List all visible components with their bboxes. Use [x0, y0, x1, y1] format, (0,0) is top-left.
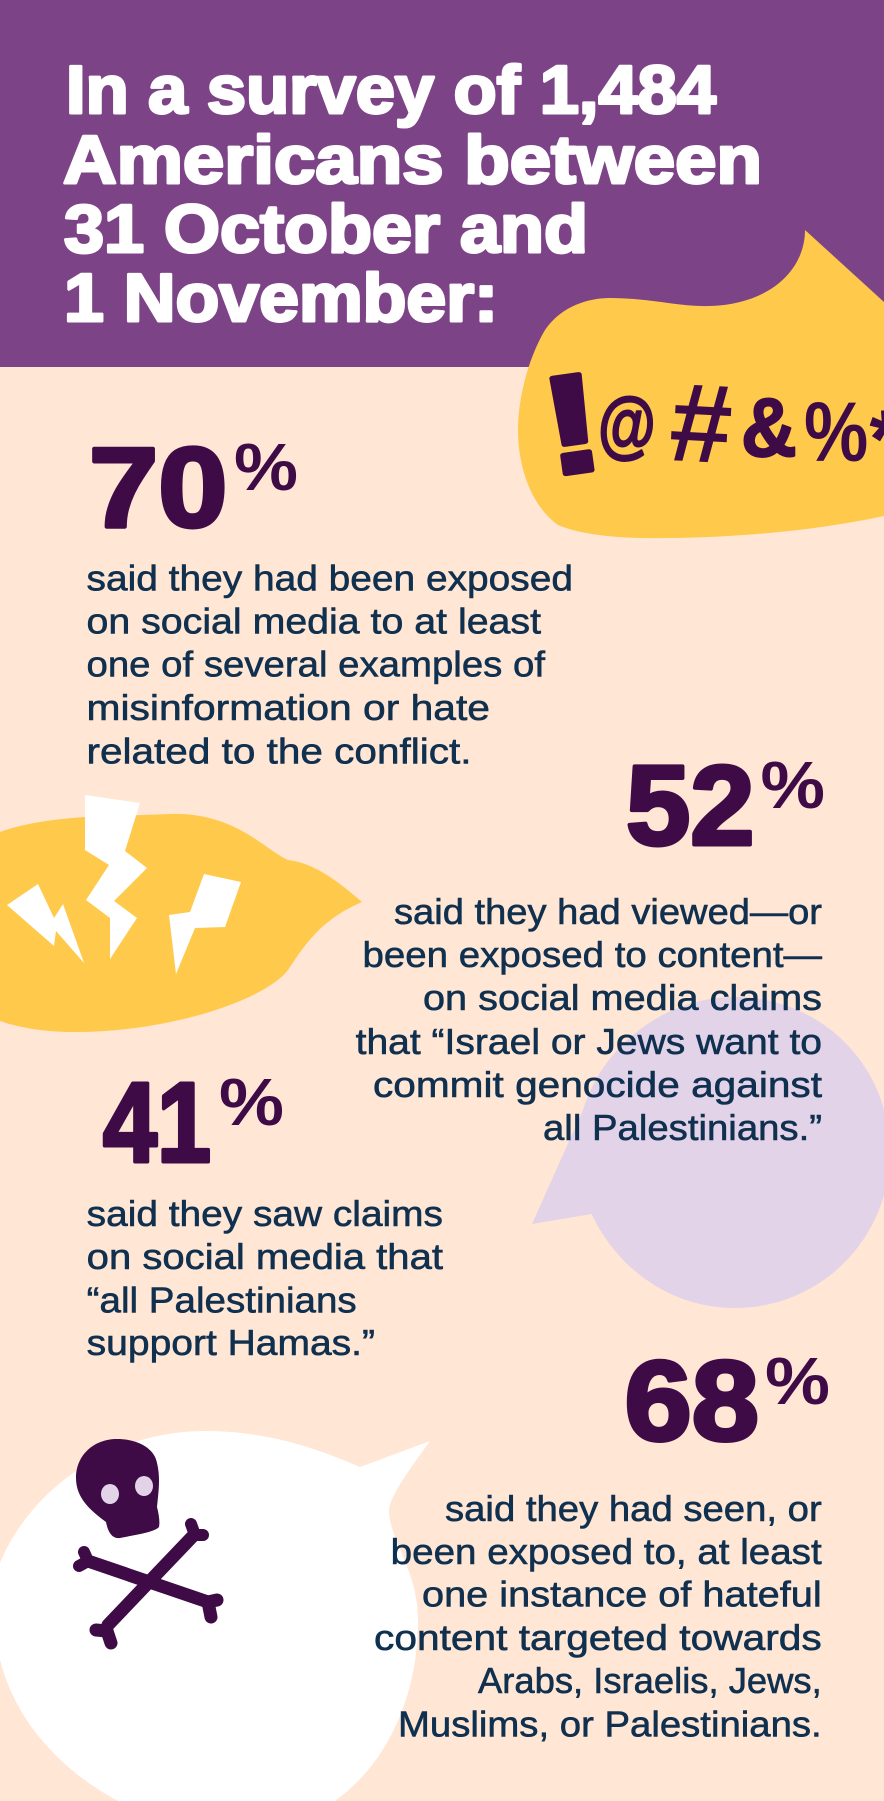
stat: 41 percent: “all Palestinians — [87, 1280, 357, 1321]
speech bubble: white — [0, 1431, 430, 1801]
stat: 70 percent: said they had been exposed — [86, 558, 573, 599]
stat: 68 percent: 68 — [624, 1338, 759, 1464]
stat: 70 percent: one of several examples of — [86, 644, 546, 685]
stat: 41 percent: on social media that — [87, 1236, 443, 1277]
stat: 41 percent: support Hamas.” — [87, 1322, 375, 1363]
stat: 70 percent: % — [234, 430, 298, 505]
stat: 68 percent: been exposed to, at least — [391, 1531, 822, 1572]
title — [63, 52, 762, 336]
header band — [0, 0, 884, 367]
stat: 52 percent: on social media claims — [423, 977, 822, 1018]
stat: 41 percent: 41 — [103, 1060, 211, 1186]
stat: 68 percent: content targeted towards — [374, 1617, 822, 1658]
speech bubble: profanity symbols: & — [741, 381, 797, 475]
stat: 70 percent: misinformation or hate — [86, 687, 490, 728]
stat: 70 percent: 70 — [89, 424, 228, 550]
stat: 52 percent: said they had viewed—or — [394, 891, 822, 932]
speech bubble: profanity symbols: @ — [598, 383, 656, 466]
stat: 52 percent: all Palestinians.” — [543, 1107, 822, 1148]
stat: 70 percent: on social media to at least — [86, 600, 541, 641]
title: In a survey of 1,484 — [66, 52, 716, 128]
stat: 68 percent: Arabs, Israelis, Jews, — [478, 1660, 822, 1701]
stat: 68 percent — [374, 1338, 830, 1745]
stat: 52 percent: been exposed to content— — [362, 934, 822, 975]
stat: 52 percent: commit genocide against — [373, 1064, 822, 1105]
speech bubble: lavender — [532, 997, 884, 1308]
stat: 52 percent — [356, 742, 825, 1148]
stat: 41 percent: said they saw claims — [87, 1193, 443, 1234]
speech bubble: profanity symbols: ! — [531, 343, 613, 506]
stat: 68 percent: one instance of hateful — [422, 1574, 822, 1615]
speech bubble: profanity symbols — [518, 230, 884, 538]
stat: 68 percent: % — [765, 1344, 830, 1419]
title: 31 October and — [64, 191, 588, 267]
stat: 68 percent: said they had seen, or — [445, 1488, 822, 1529]
stat: 41 percent: % — [219, 1065, 284, 1140]
stat: 41 percent — [87, 1060, 443, 1363]
stat: 52 percent: 52 — [626, 742, 754, 868]
stat: 52 percent: % — [760, 748, 825, 823]
speech bubble: profanity symbols: % — [804, 385, 868, 479]
stat: 68 percent: Muslims, or Palestinians. — [398, 1704, 822, 1745]
stat: 70 percent: related to the conflict. — [86, 730, 472, 771]
title: 1 November: — [64, 260, 498, 336]
stat: 52 percent: that “Israel or Jews want to — [356, 1021, 822, 1062]
speech bubble: lightning bolts — [0, 795, 362, 1032]
speech bubble: profanity symbols: # — [667, 359, 735, 487]
title: Americans between — [63, 122, 762, 198]
icon: skull and crossbones — [76, 1439, 217, 1643]
stat: 70 percent — [86, 424, 573, 771]
